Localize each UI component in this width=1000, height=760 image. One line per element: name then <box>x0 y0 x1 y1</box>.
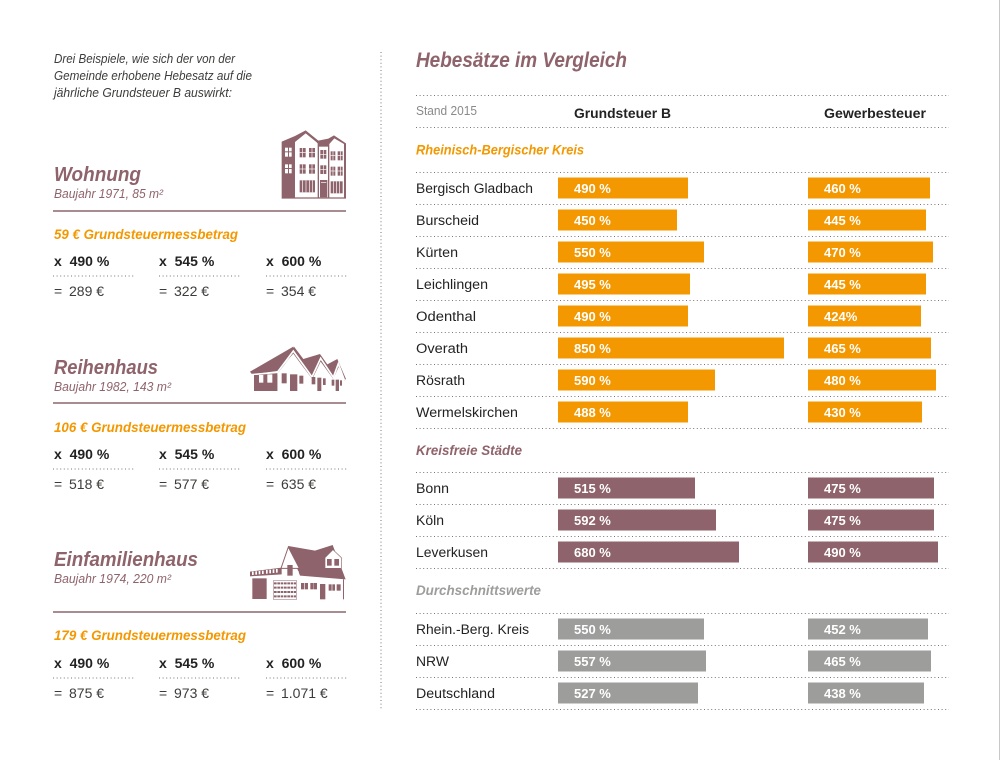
row: Deutschland: Deutschland <box>416 686 495 701</box>
values: Einfamilienhaus: 1.071 € <box>281 685 328 701</box>
heading: Wohnung: Wohnung <box>54 164 141 186</box>
table header: Gewerbesteuer <box>824 105 927 121</box>
values: Wohnung: x 545 % <box>159 253 215 269</box>
row: Odenthal: Odenthal <box>416 309 476 324</box>
subheading: Reihenhaus: Baujahr 1982, 143 m² <box>54 380 172 394</box>
icon: detached house <box>250 545 346 599</box>
row: Köln: 475 % <box>824 513 861 528</box>
section: Durchschnittswerte <box>416 582 949 710</box>
row: Leverkusen: 680 % <box>574 545 611 560</box>
row: Wermelskirchen: Wermelskirchen <box>416 405 518 420</box>
row: Burscheid: Burscheid <box>416 213 479 228</box>
row: Overath <box>416 338 931 358</box>
values: Einfamilienhaus: 973 € <box>174 685 209 701</box>
intro text: jährliche Grundsteuer B auswirkt: <box>52 86 232 100</box>
label: Grundsteuermessbetrag Reihenhaus: 106 € Grundsteuermessbetrag <box>54 419 246 435</box>
values: Wohnung: x 490 % <box>54 253 110 269</box>
table header: Grundsteuer B <box>574 105 671 121</box>
values: Einfamilienhaus <box>53 655 347 701</box>
row: Wermelskirchen <box>416 402 922 422</box>
row: NRW <box>416 650 931 672</box>
values: Wohnung: x 600 % <box>266 253 322 269</box>
row: Leverkusen: Leverkusen <box>416 545 488 560</box>
row: Bonn: 475 % <box>824 481 861 496</box>
panel: Wohnung <box>53 130 347 299</box>
row: NRW: 557 % <box>574 654 611 669</box>
row: Rhein.-Berg. Kreis <box>416 618 928 640</box>
row: Kürten: Kürten <box>416 245 458 260</box>
values: Einfamilienhaus: 875 € <box>69 685 104 701</box>
section: Kreisfreie Städte <box>416 442 949 568</box>
values: Einfamilienhaus: x 490 % <box>54 655 110 671</box>
row: Rhein.-Berg. Kreis: Rhein.-Berg. Kreis <box>416 622 529 637</box>
values: Einfamilienhaus: x 545 % <box>159 655 215 671</box>
row: Kürten: 470 % <box>824 245 861 260</box>
row: Burscheid <box>416 210 926 230</box>
row: Rhein.-Berg. Kreis: 452 % <box>824 622 861 637</box>
row: Deutschland: 527 % <box>574 686 611 701</box>
row: Kürten <box>416 242 933 262</box>
row: Bergisch Gladbach <box>416 178 930 198</box>
intro text: Drei Beispiele, wie sich der von der <box>54 52 236 66</box>
values: Wohnung: = <box>54 283 62 299</box>
section: Rheinisch-Bergischer Kreis: Rheinisch-Bergischer Kreis <box>416 142 584 158</box>
values: Reihenhaus: x 545 % <box>159 446 215 462</box>
panel: Einfamilienhaus <box>53 545 347 701</box>
values: Reihenhaus: x 600 % <box>266 446 322 462</box>
row: Wermelskirchen: 430 % <box>824 405 861 420</box>
row: Odenthal: 424% <box>824 309 858 324</box>
row: Köln: 592 % <box>574 513 611 528</box>
values: Reihenhaus: = <box>266 476 274 492</box>
title: Hebesätze im Vergleich <box>416 49 627 72</box>
row: Rösrath: Rösrath <box>416 373 465 388</box>
row: Köln: Köln <box>416 513 444 528</box>
values: Einfamilienhaus: x 600 % <box>266 655 322 671</box>
row: Bergisch Gladbach: Bergisch Gladbach <box>416 181 533 196</box>
values: Reihenhaus: 518 € <box>69 476 104 492</box>
row: Leichlingen <box>416 274 926 294</box>
values: Einfamilienhaus: = <box>266 685 274 701</box>
row: Odenthal <box>416 306 921 326</box>
row: NRW: NRW <box>416 654 449 669</box>
row: Bonn: 515 % <box>574 481 611 496</box>
row: Leverkusen: 490 % <box>824 545 861 560</box>
subheading: Einfamilienhaus: Baujahr 1974, 220 m² <box>54 572 172 586</box>
row: Rhein.-Berg. Kreis: 550 % <box>574 622 611 637</box>
values: Wohnung: = <box>266 283 274 299</box>
table header <box>416 96 949 128</box>
label: Grundsteuermessbetrag Einfamilienhaus: 179 € Grundsteuermessbetrag <box>54 627 246 643</box>
heading: Reihenhaus: Reihenhaus <box>54 357 158 379</box>
row: Rösrath: 480 % <box>824 373 861 388</box>
values: Reihenhaus: = <box>54 476 62 492</box>
row: Bergisch Gladbach: 490 % <box>574 181 611 196</box>
values: Reihenhaus <box>53 446 347 492</box>
values: Wohnung: = <box>159 283 167 299</box>
row: Leichlingen: 445 % <box>824 277 861 292</box>
row: Burscheid: 445 % <box>824 213 861 228</box>
values: Reihenhaus: 635 € <box>281 476 316 492</box>
row: Leichlingen: 495 % <box>574 277 611 292</box>
row: Overath: 850 % <box>574 341 611 356</box>
row: Bonn <box>416 478 934 498</box>
row: Deutschland <box>416 682 924 704</box>
values: Wohnung: 289 € <box>69 283 104 299</box>
row: Bergisch Gladbach: 460 % <box>824 181 861 196</box>
row: Bonn: Bonn <box>416 481 449 496</box>
values: Reihenhaus: 577 € <box>174 476 209 492</box>
values: Einfamilienhaus: = <box>159 685 167 701</box>
values: Wohnung <box>53 253 347 299</box>
row: Burscheid: 450 % <box>574 213 611 228</box>
intro text: Gemeinde erhobene Hebesatz auf die <box>54 69 252 83</box>
values: Wohnung: 322 € <box>174 283 209 299</box>
row: Rösrath <box>416 370 936 390</box>
panel: Reihenhaus <box>53 347 347 492</box>
row: Rösrath: 590 % <box>574 373 611 388</box>
subheading: Wohnung: Baujahr 1971, 85 m² <box>54 187 164 201</box>
row: Overath: Overath <box>416 341 468 356</box>
row: Deutschland: 438 % <box>824 686 861 701</box>
table header: Stand 2015 <box>416 104 477 118</box>
row: NRW: 465 % <box>824 654 861 669</box>
row: Leverkusen <box>416 542 938 562</box>
values: Reihenhaus: = <box>159 476 167 492</box>
intro text <box>52 52 252 100</box>
values: Reihenhaus: x 490 % <box>54 446 110 462</box>
icon: apartment building <box>282 130 346 199</box>
icon: row houses <box>250 347 346 392</box>
row: Köln <box>416 510 934 530</box>
values: Wohnung: 354 € <box>281 283 316 299</box>
row: Leichlingen: Leichlingen <box>416 277 488 292</box>
section: Rheinisch-Bergischer Kreis <box>416 142 949 428</box>
row: Kürten: 550 % <box>574 245 611 260</box>
row: Odenthal: 490 % <box>574 309 611 324</box>
row: Overath: 465 % <box>824 341 861 356</box>
row: Wermelskirchen: 488 % <box>574 405 611 420</box>
values: Einfamilienhaus: = <box>54 685 62 701</box>
label: Grundsteuermessbetrag Wohnung: 59 € Grundsteuermessbetrag <box>54 226 238 242</box>
section: Kreisfreie Städte: Kreisfreie Städte <box>416 442 522 458</box>
heading: Einfamilienhaus: Einfamilienhaus <box>54 549 198 571</box>
section: Durchschnittswerte: Durchschnittswerte <box>416 582 541 598</box>
